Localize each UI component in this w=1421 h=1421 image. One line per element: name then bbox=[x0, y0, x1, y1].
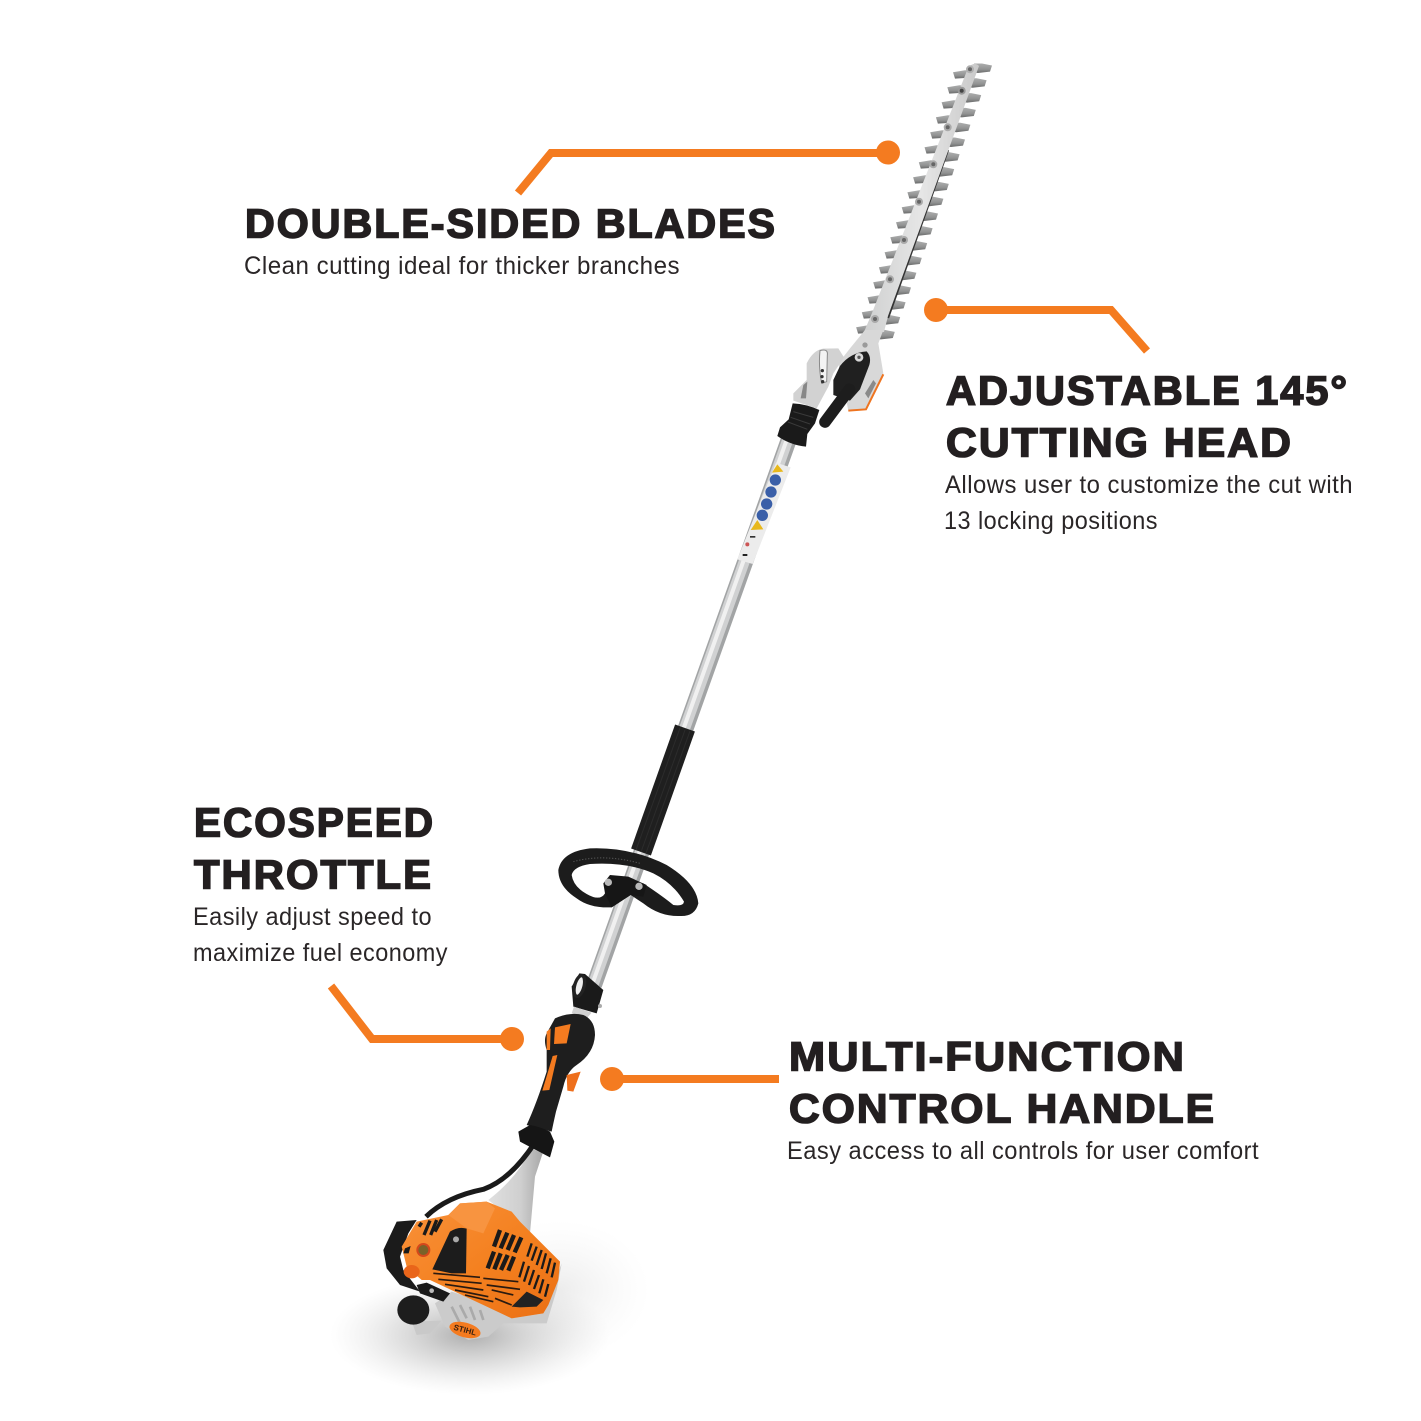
fuel primer bbox=[416, 1243, 430, 1257]
orange engine cover bbox=[402, 1202, 560, 1318]
blade bar bbox=[861, 64, 979, 349]
description: adjustable cutting head: Allows user to customize the cut with bbox=[945, 471, 1353, 499]
gray pivot joint bbox=[793, 348, 844, 408]
feature text: multi-function control handle bbox=[787, 1034, 1259, 1165]
orange thumb switch bbox=[554, 1024, 571, 1044]
heading: adjustable cutting head: CUTTING HEAD bbox=[946, 420, 1293, 466]
description: double-sided blades: Clean cutting ideal for thicker branches bbox=[244, 252, 680, 280]
cover vents bbox=[419, 1219, 555, 1305]
dark vent opening bbox=[512, 1292, 543, 1307]
starter clip bbox=[417, 1283, 450, 1302]
product: pole hedge trimmer bbox=[330, 64, 992, 1395]
description: ecospeed throttle: Easily adjust speed to bbox=[193, 903, 432, 931]
heading: ecospeed throttle: THROTTLE bbox=[194, 852, 433, 898]
description: ecospeed throttle: maximize fuel economy bbox=[193, 939, 448, 967]
heading: multi-function control handle: CONTROL HANDLE bbox=[789, 1086, 1216, 1132]
black foam grip bbox=[636, 728, 690, 853]
blade teeth bbox=[856, 64, 992, 339]
black adjustment pad bbox=[833, 351, 870, 401]
brand badge: STIHL bbox=[453, 1323, 477, 1338]
callout line: multi-function control handle bbox=[600, 1067, 779, 1091]
loop handle bbox=[558, 848, 698, 916]
cover highlight facet bbox=[448, 1202, 495, 1233]
neck, cable and control handle bbox=[426, 1007, 595, 1233]
engine bbox=[383, 1202, 562, 1341]
description: multi-function control handle: Easy access to all controls for user comfort bbox=[787, 1137, 1259, 1165]
orange primer bulb bbox=[404, 1265, 420, 1278]
callout line: adjustable cutting head bbox=[924, 298, 1147, 351]
fuel cap foot bbox=[412, 1321, 442, 1335]
callout line: ecospeed throttle bbox=[331, 986, 524, 1051]
feature text: double-sided blades bbox=[244, 200, 777, 280]
engine neck housing bbox=[488, 1148, 543, 1233]
heading: double-sided blades: DOUBLE-SIDED BLADES bbox=[245, 200, 777, 246]
black air intake bbox=[432, 1228, 467, 1273]
engine base bbox=[435, 1263, 562, 1340]
heading: adjustable cutting head: ADJUSTABLE 145° bbox=[946, 368, 1349, 414]
heading: ecospeed throttle: ECOSPEED bbox=[194, 800, 435, 846]
small side opening bbox=[403, 1246, 411, 1253]
gearbox body bbox=[838, 330, 883, 411]
callout line: double-sided blades bbox=[518, 140, 900, 193]
feature text: adjustable cutting head bbox=[944, 368, 1353, 535]
power cable bbox=[426, 1144, 534, 1217]
orange side switch bbox=[547, 1028, 551, 1050]
orange trigger bbox=[567, 1072, 581, 1092]
shaft clamp bbox=[572, 973, 603, 1013]
brand badge bbox=[448, 1319, 482, 1341]
ground shadow bbox=[330, 1220, 650, 1395]
black shaft collar bbox=[777, 403, 819, 447]
fuel cap bbox=[397, 1295, 429, 1325]
black lever grip bbox=[825, 389, 849, 422]
feature text: ecospeed throttle bbox=[193, 800, 448, 967]
cutting head bbox=[777, 330, 883, 447]
control handle bbox=[518, 1007, 595, 1157]
aluminium drive shaft bbox=[592, 425, 794, 985]
description: adjustable cutting head: 13 locking positions bbox=[944, 507, 1158, 535]
engine rear black shell bbox=[383, 1220, 420, 1292]
heading: multi-function control handle: MULTI-FUNCTION bbox=[789, 1034, 1186, 1080]
orange lock lever bbox=[542, 1055, 557, 1091]
warning decal bbox=[737, 463, 791, 564]
